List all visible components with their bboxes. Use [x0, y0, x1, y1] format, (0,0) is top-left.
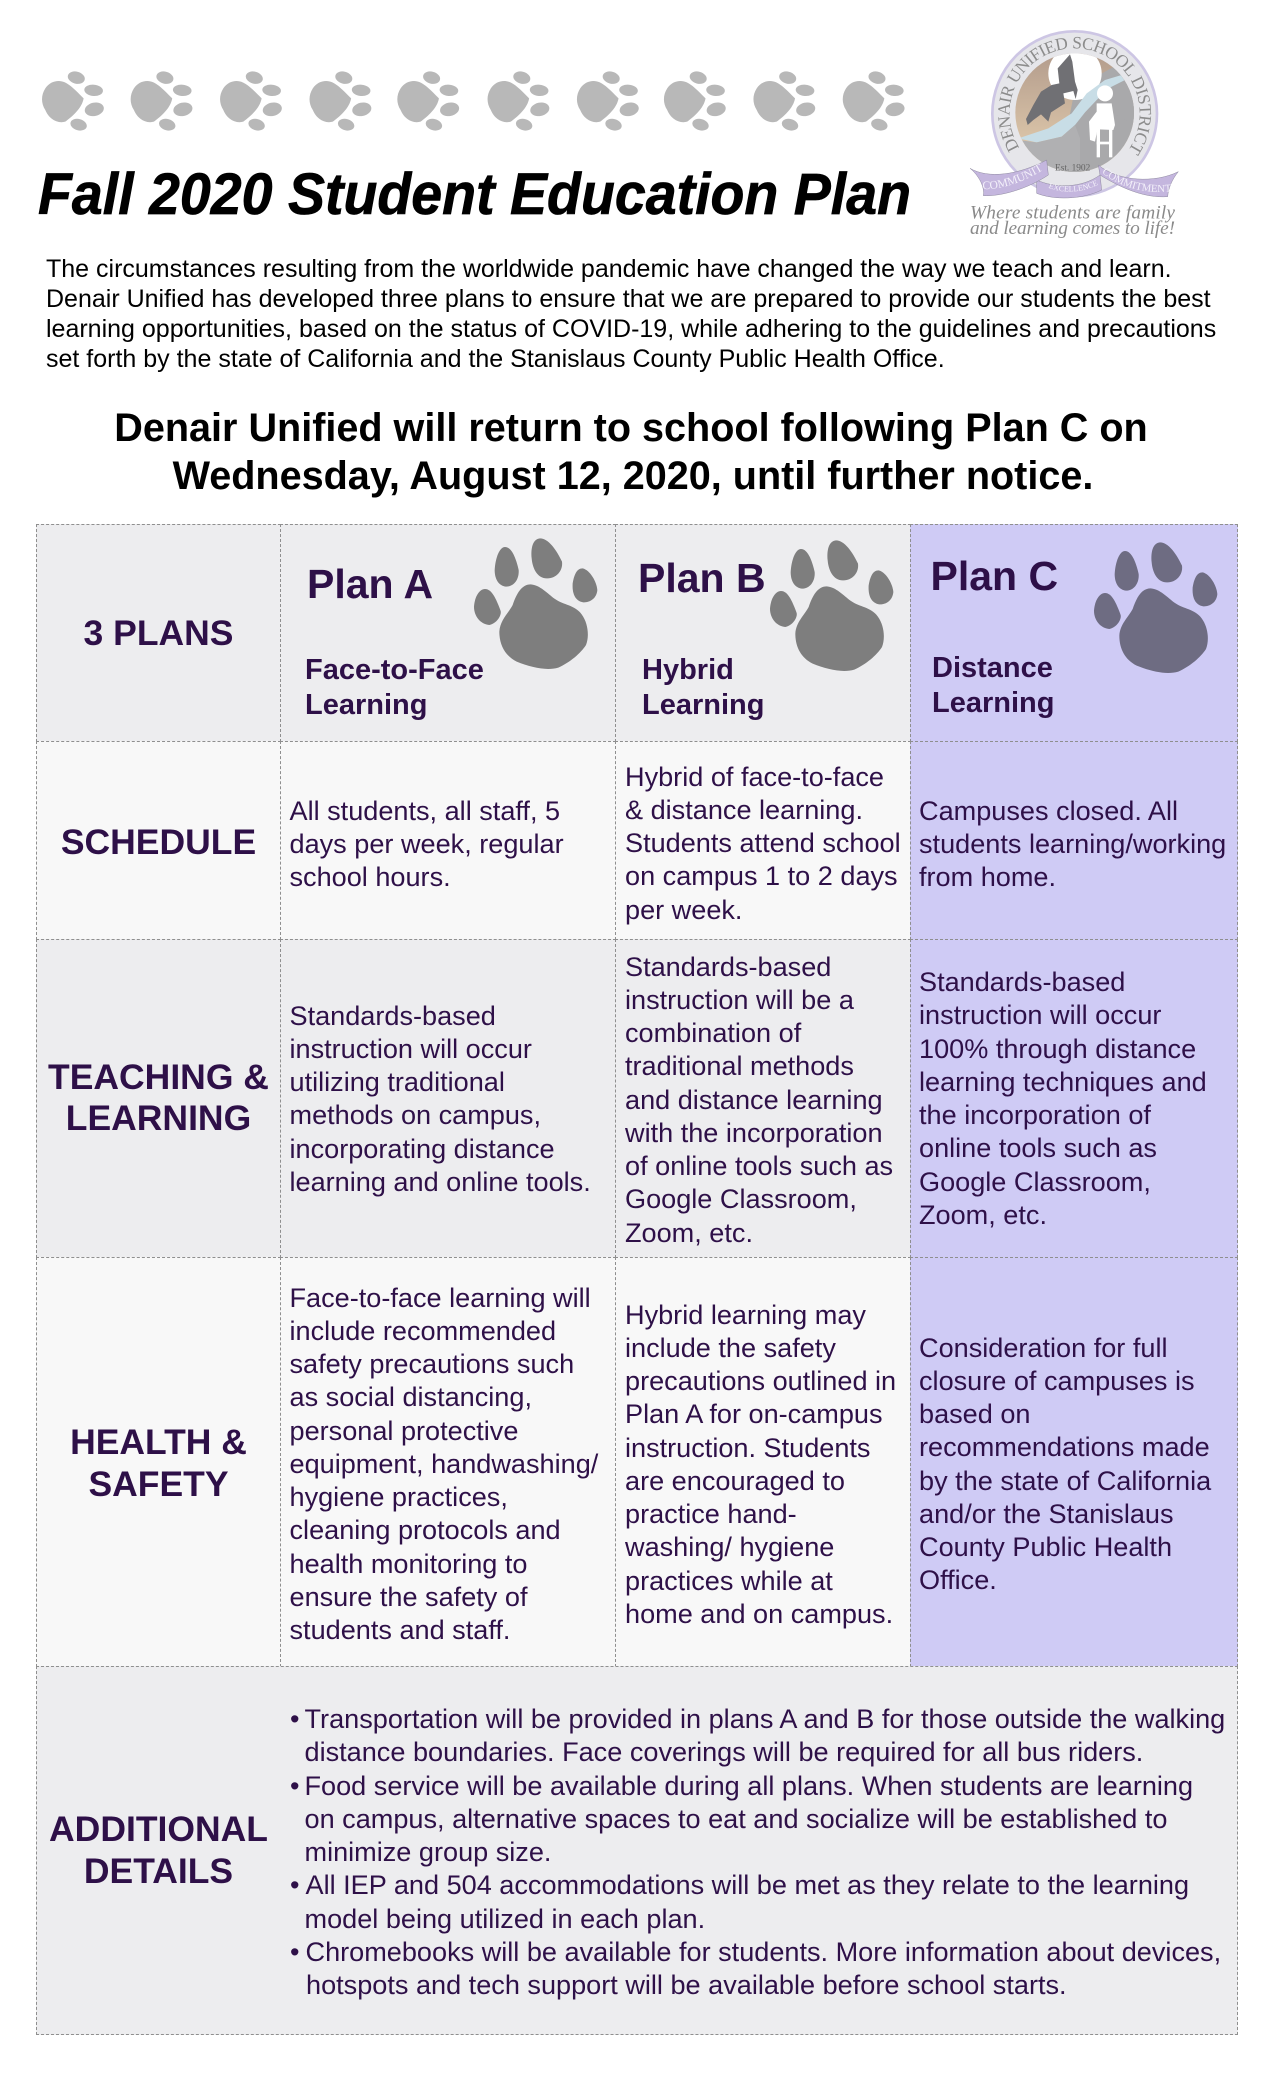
teaching plan B text: Zoom, etc.: [625, 1216, 753, 1248]
health plan B text: practices while at: [625, 1564, 833, 1596]
health plan A text: ensure the safety of: [290, 1581, 527, 1612]
schedule plan C text: students learning/working: [919, 828, 1226, 859]
teaching plan C text: Standards-based: [919, 966, 1125, 997]
row heading: schedule: SCHEDULE: [61, 822, 256, 862]
schedule plan B text: per week.: [625, 894, 742, 924]
row heading: teaching and learning: TEACHING &: [48, 1056, 269, 1096]
intro paragraph: The circumstances resulting from the worldwide pandemic have changed the way we teach and learn.: [46, 255, 1172, 283]
bullet list: •: [290, 1936, 300, 1967]
schedule plan C text: from home.: [919, 861, 1056, 892]
seal ring: DENAIR UNIFIED SCHOOL DISTRICT: [998, 36, 1152, 156]
plan B heading: Plan B: [638, 555, 766, 601]
plan C subtitle: Distance: [932, 652, 1053, 684]
teaching plan B text: with the incorporation: [625, 1117, 883, 1148]
teaching plan C text: the incorporation of: [919, 1099, 1151, 1130]
health plan B text: include the safety: [625, 1332, 836, 1363]
teaching plan A text: instruction will occur: [290, 1033, 532, 1064]
plan B subtitle: [642, 654, 764, 721]
plan A subtitle: Learning: [305, 689, 427, 721]
bullet list: on campus, alternative spaces to eat and socialize will be established to: [304, 1803, 1167, 1834]
schedule plan B text: on campus 1 to 2 days: [625, 860, 898, 891]
schedule plan C text: Campuses closed. All: [919, 794, 1178, 826]
bullet list: •: [290, 1703, 300, 1734]
health plan B text: washing/ hygiene: [625, 1531, 834, 1562]
teaching plan B text: Google Classroom,: [625, 1183, 857, 1214]
teaching plan C text: 100% through distance: [919, 1032, 1196, 1064]
panel: schedule plan A: [280, 741, 616, 940]
plan B subtitle: Learning: [642, 689, 764, 721]
schedule plan A text: All students, all staff, 5: [290, 794, 560, 826]
plan A subtitle: [305, 654, 484, 721]
logo tagline: [970, 203, 1175, 239]
row heading: health and safety: SAFETY: [88, 1464, 229, 1504]
panel: teaching plan C: [910, 939, 1238, 1258]
row heading: additional details: ADDITIONAL: [49, 1809, 268, 1849]
row of paw prints: [42, 71, 904, 131]
health plan B text: instruction. Students: [625, 1432, 870, 1462]
logo tagline: Where students are family: [970, 203, 1175, 224]
health plan B text: home and on campus.: [625, 1598, 893, 1629]
icon: plan B paw: [770, 540, 894, 671]
health plan A text: as social distancing,: [290, 1381, 532, 1412]
teaching plan B text: Standards-based: [625, 950, 831, 982]
schedule plan A text: [290, 794, 564, 892]
health plan C text: by the state of California: [919, 1465, 1211, 1496]
panel: 3 plans label: [36, 524, 281, 742]
teaching plan C text: learning techniques and: [919, 1066, 1207, 1097]
plan C subtitle: Learning: [932, 687, 1054, 719]
seal picture: [1015, 47, 1135, 173]
panel: additional details: [36, 1666, 1238, 2035]
headline: Denair Unified will return to school following Plan C on: [114, 406, 1148, 450]
health plan B text: [625, 1298, 896, 1629]
row heading: teaching and learning: [48, 1056, 269, 1138]
icon: plan A paw: [474, 538, 598, 669]
teaching plan A text: [290, 1000, 591, 1197]
plan A heading: Plan A: [307, 561, 433, 607]
panel: schedule label: [36, 741, 281, 940]
plan A subtitle: Face-to-Face: [305, 654, 484, 686]
health plan A text: students and staff.: [290, 1614, 510, 1645]
bullet list: •: [290, 1869, 300, 1900]
teaching plan C text: [919, 966, 1207, 1230]
teaching plan C text: online tools such as: [919, 1132, 1157, 1163]
panel: plan C header: [910, 524, 1238, 742]
teaching plan B text: of online tools such as: [625, 1150, 893, 1181]
teaching plan B text: and distance learning: [625, 1084, 883, 1114]
motto banner: COMMITMENT: [1103, 168, 1171, 192]
district logo: [970, 30, 1178, 239]
plan C heading: Plan C: [930, 553, 1058, 599]
teaching plan B text: combination of: [625, 1017, 801, 1048]
teaching plan B text: traditional methods: [625, 1050, 854, 1081]
health plan A text: safety precautions such: [290, 1348, 574, 1379]
health plan A text: equipment, handwashing/: [290, 1448, 598, 1479]
schedule plan A text: school hours.: [290, 861, 451, 892]
bullet list: hotspots and tech support will be available before school starts.: [306, 1969, 1067, 2000]
row heading: additional details: [49, 1809, 268, 1890]
health plan A text: personal protective: [290, 1414, 518, 1446]
panel: health plan A: [280, 1257, 616, 1667]
bullet list: Transportation will be provided in plans A and B for those outside the walking: [304, 1703, 1225, 1734]
logo tagline: and learning comes to life!: [970, 218, 1175, 239]
motto banner: Est. 1902: [1055, 164, 1091, 174]
bullet list: Chromebooks will be available for students. More information about devices,: [306, 1936, 1221, 1967]
teaching plan A text: Standards-based: [290, 1000, 496, 1030]
panel: health plan B: [615, 1257, 911, 1667]
schedule plan A text: days per week, regular: [290, 828, 564, 859]
bullet list: Food service will be available during all plans. When students are learning: [304, 1770, 1193, 1800]
panel: schedule plan B: [615, 741, 911, 940]
teaching plan C text: Google Classroom,: [919, 1166, 1151, 1196]
health plan C text: Office.: [919, 1564, 997, 1595]
schedule plan B text: Students attend school: [625, 827, 901, 858]
title: Fall 2020 Student Education Plan: [38, 162, 911, 227]
panel: health label: [36, 1257, 281, 1667]
intro paragraph: [46, 255, 1216, 373]
bullet list: •: [290, 1770, 300, 1800]
intro paragraph: set forth by the state of California and the Stanislaus County Public Health Office.: [46, 345, 945, 373]
teaching plan B text: instruction will be a: [625, 984, 854, 1015]
teaching plan A text: learning and online tools.: [290, 1166, 591, 1197]
schedule plan B text: [625, 760, 901, 924]
motto banner: EXCELLENCE: [1048, 180, 1098, 192]
health plan C text: Consideration for full: [919, 1332, 1168, 1363]
teaching plan B text: [625, 950, 893, 1248]
motto banner: [970, 160, 1178, 198]
bullet list: distance boundaries. Face coverings will be required for all bus riders.: [304, 1736, 1143, 1767]
health plan C text: recommendations made: [919, 1431, 1210, 1462]
intro paragraph: learning opportunities, based on the status of COVID-19, while adhering to the guidelines and precautions: [46, 315, 1216, 343]
teaching plan A text: incorporating distance: [290, 1132, 555, 1164]
bullet list: [290, 1703, 1225, 2000]
health plan B text: Plan A for on-campus: [625, 1398, 883, 1429]
intro paragraph: Denair Unified has developed three plans to ensure that we are prepared to provide our students the best: [46, 285, 1211, 313]
schedule plan B text: & distance learning.: [625, 794, 863, 825]
health plan C text: and/or the Stanislaus: [919, 1498, 1174, 1529]
panel: teaching label: [36, 939, 281, 1258]
health plan A text: include recommended: [290, 1315, 556, 1346]
schedule plan B text: Hybrid of face-to-face: [625, 760, 884, 792]
panel: plan A header: [280, 524, 616, 742]
schedule plan C text: [919, 794, 1226, 892]
health plan A text: hygiene practices,: [290, 1481, 508, 1512]
panel: schedule plan C: [910, 741, 1238, 940]
health plan A text: Face-to-face learning will: [290, 1282, 591, 1312]
row heading: additional details: DETAILS: [84, 1850, 233, 1890]
bullet list: minimize group size.: [304, 1836, 551, 1867]
icon: plan C paw: [1094, 542, 1218, 673]
health plan C text: closure of campuses is: [919, 1365, 1195, 1396]
panel: teaching plan A: [280, 939, 616, 1258]
health plan A text: [290, 1282, 598, 1645]
panel: plan B header: [615, 524, 911, 742]
health plan B text: precautions outlined in: [625, 1365, 896, 1396]
panel: teaching plan B: [615, 939, 911, 1258]
bullet list: model being utilized in each plan.: [304, 1902, 705, 1934]
health plan B text: Hybrid learning may: [625, 1298, 866, 1330]
plan B subtitle: Hybrid: [642, 654, 734, 686]
panel: health plan C: [910, 1257, 1238, 1667]
teaching plan A text: utilizing traditional: [290, 1066, 505, 1097]
health plan C text: [919, 1332, 1212, 1595]
plan C subtitle: [932, 652, 1054, 719]
row heading: health and safety: [70, 1422, 247, 1504]
headline: [114, 406, 1148, 498]
health plan C text: County Public Health: [919, 1531, 1172, 1562]
health plan B text: practice hand-: [625, 1498, 797, 1529]
row heading: health and safety: HEALTH &: [70, 1422, 247, 1462]
teaching plan A text: methods on campus,: [290, 1099, 541, 1130]
health plan A text: health monitoring to: [290, 1548, 527, 1578]
health plan A text: cleaning protocols and: [290, 1514, 561, 1545]
health plan C text: based on: [919, 1398, 1030, 1429]
teaching plan C text: Zoom, etc.: [919, 1199, 1047, 1230]
teaching plan C text: instruction will occur: [919, 999, 1161, 1030]
health plan B text: are encouraged to: [625, 1465, 845, 1496]
row heading: teaching and learning: LEARNING: [66, 1098, 251, 1138]
row heading: 3 plans: 3 PLANS: [84, 613, 233, 653]
bullet list: All IEP and 504 accommodations will be met as they relate to the learning: [306, 1869, 1189, 1900]
headline: Wednesday, August 12, 2020, until further notice.: [173, 454, 1093, 498]
